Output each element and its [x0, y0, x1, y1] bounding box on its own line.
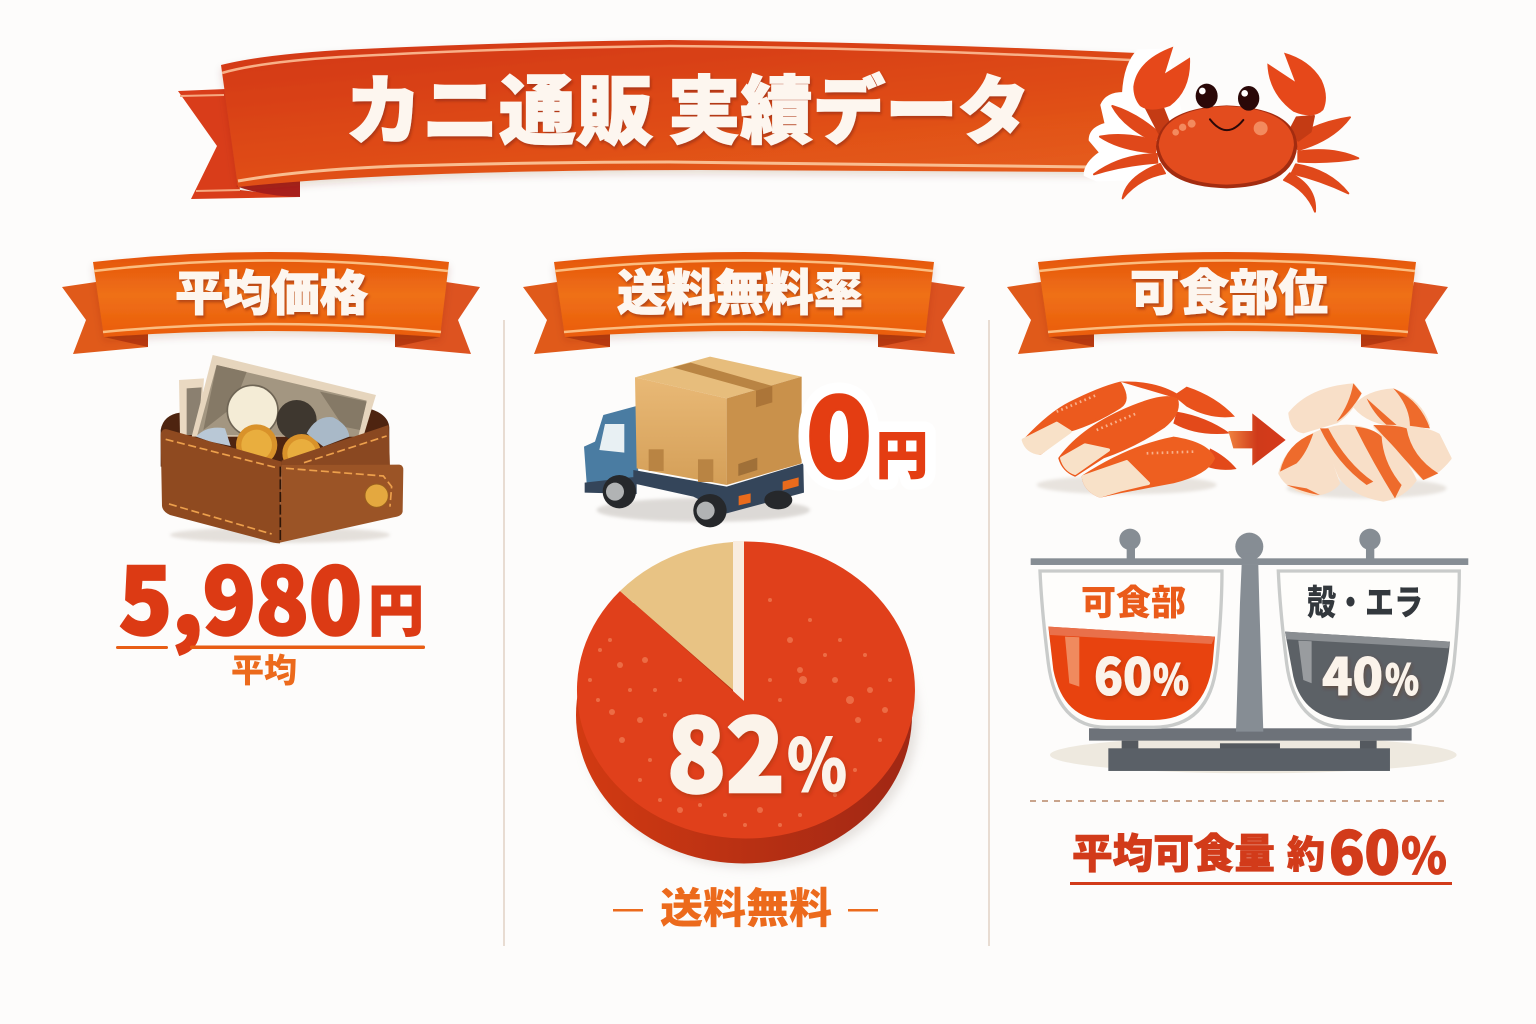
pie value: 82 [667, 676, 785, 822]
average edible amount: 60 [1329, 806, 1400, 891]
crab left claw [1133, 47, 1190, 110]
section heading: 送料無料率 [617, 254, 863, 325]
pie slice 82 [577, 541, 915, 838]
banner fold [236, 175, 300, 197]
left bowl value: % [1153, 647, 1189, 708]
panel: free shipping rate [523, 252, 965, 936]
wallet front right [280, 465, 403, 543]
box [635, 357, 802, 485]
banner ribbon body [221, 40, 1137, 187]
truck cab [584, 406, 638, 483]
average edible amount [1072, 806, 1447, 891]
banknotes [179, 355, 376, 440]
left bowl [1040, 571, 1222, 727]
panel: edible portion [1007, 252, 1468, 891]
divider left [503, 320, 505, 946]
scale post and beam [1031, 529, 1468, 732]
left bowl value: 60 [1094, 636, 1152, 710]
stitches [166, 436, 392, 534]
divider right [988, 320, 990, 946]
crab spots [1172, 120, 1268, 136]
title text: カニ通販 [345, 50, 653, 160]
coins [196, 417, 349, 473]
wallet back flap [282, 425, 390, 467]
arrow [1228, 413, 1286, 466]
price caption: 平均 [231, 644, 297, 692]
section ribbon [523, 252, 965, 354]
banner left tail [178, 89, 300, 199]
crab sticker halo [1085, 50, 1180, 180]
icon: shelled crab legs [1023, 381, 1237, 496]
pie caption: 送料無料 [660, 875, 832, 936]
scale shadow [1050, 737, 1457, 773]
crab body [1156, 105, 1297, 188]
section heading: 平均価格 [175, 254, 368, 324]
pie slice 18 [620, 542, 733, 690]
title text [345, 50, 1030, 160]
icon: wallet with cash and coins [161, 355, 403, 543]
pie value [667, 676, 847, 822]
section heading: 可食部位 [1130, 254, 1328, 325]
crab right claw [1267, 53, 1326, 115]
pie value: % [787, 707, 847, 812]
pie speckles [588, 598, 892, 827]
right bowl value [1322, 636, 1419, 710]
left bowl label: 可食部 [1081, 575, 1186, 626]
balance scale [1031, 529, 1468, 773]
left bowl value [1094, 636, 1189, 710]
truck lamps [739, 477, 799, 505]
average edible amount: 平均可食量 [1072, 820, 1275, 880]
crab eyes [1196, 84, 1259, 111]
right bowl [1278, 571, 1459, 727]
title text: 実績データ [668, 52, 1030, 159]
zero yen badge: 円 [876, 414, 928, 489]
wallet snap [365, 484, 388, 507]
icon: delivery truck with box [584, 357, 810, 527]
right bowl value: % [1385, 647, 1419, 708]
zero yen badge [806, 352, 928, 509]
pie chart 82% [576, 541, 918, 868]
pie gap [733, 541, 744, 701]
title banner [178, 40, 1137, 199]
zero yen badge: 0 [806, 352, 872, 509]
wallet front left [161, 429, 282, 543]
panel: average price [62, 252, 480, 692]
pie depth [576, 566, 912, 864]
crab mascot [1085, 47, 1358, 212]
pie shadow [582, 572, 918, 868]
average edible amount: 約 [1287, 824, 1325, 879]
right bowl value: 40 [1322, 636, 1383, 710]
zero yen badge: 0 [806, 352, 872, 509]
price value: 5,980 [119, 529, 362, 661]
crab illustrations and scale [1023, 381, 1468, 773]
crab smile [1210, 119, 1243, 130]
icon: crab meat [1280, 383, 1450, 500]
section ribbon [62, 252, 480, 354]
price value: 円 [368, 567, 424, 648]
section ribbon [1007, 252, 1448, 354]
right bowl label: 殻・エラ [1307, 575, 1423, 626]
crab legs [1094, 106, 1358, 212]
truck chassis [585, 463, 804, 513]
average edible amount: % [1401, 817, 1447, 889]
truck wheels [603, 475, 792, 527]
zero yen badge: 円 [876, 414, 928, 489]
price underline [116, 646, 425, 649]
scale base [1089, 728, 1412, 771]
